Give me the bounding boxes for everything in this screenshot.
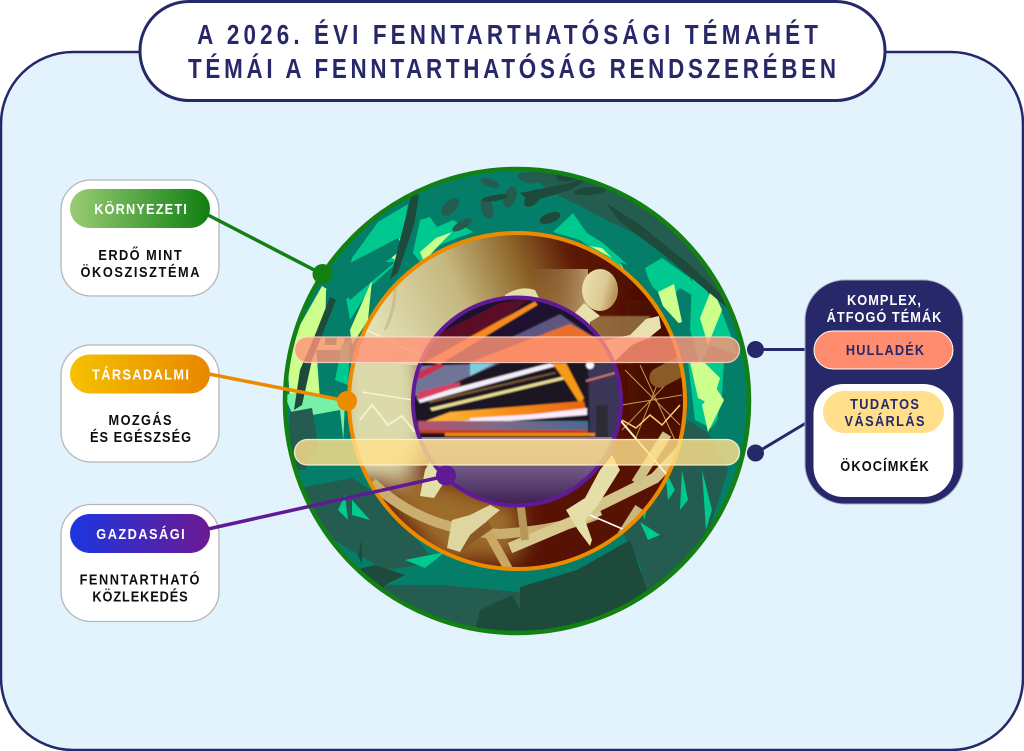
card: társadalmi [61, 345, 219, 462]
pill: gazdasági: GAZDASÁGI [96, 525, 185, 542]
connector: gazdasági [208, 466, 456, 529]
forest: bright clearings [287, 204, 738, 439]
pill: társadalmi [70, 354, 210, 394]
connector: társadalmi [209, 374, 357, 411]
wheel spokes [359, 287, 676, 567]
pill: tudatos vásárlás: TUDATOS [850, 395, 919, 412]
text: fenntartható közlekedés [80, 569, 200, 605]
forest: canopy top [528, 172, 718, 290]
text: erdő mint ökoszisztéma [80, 245, 200, 280]
pill: hulladék: HULLADÉK [846, 341, 924, 358]
panel heading: ÁTFOGÓ TÉMÁK [827, 307, 941, 325]
panel heading: KOMPLEX, [847, 291, 921, 308]
connector: tudatos vásárlás [747, 423, 806, 462]
text: mozgás és egészség [90, 411, 191, 445]
text: erdő mint ökoszisztéma: ÖKOSZISZTÉMA [80, 263, 200, 280]
card: környezeti [61, 180, 219, 296]
forest: tree trunks [325, 238, 695, 345]
text: erdő mint ökoszisztéma: ERDŐ MINT [98, 245, 182, 263]
panel: komplex, átfogó témák [805, 280, 963, 504]
panel heading [827, 291, 941, 325]
pill: környezeti [70, 189, 210, 228]
title: TÉMÁI A FENNTARTHATÓSÁG RENDSZERÉBEN [188, 51, 836, 85]
pill: hulladék [814, 331, 953, 369]
text: fenntartható közlekedés: KÖZLEKEDÉS [92, 587, 188, 605]
connector: környezeti [208, 215, 332, 284]
text: fenntartható közlekedés: FENNTARTHATÓ [80, 569, 200, 588]
pill: környezeti: KÖRNYEZETI [94, 200, 187, 217]
box: tudatos vásárlás [814, 384, 954, 497]
text: mozgás és egészség: ÉS EGÉSZSÉG [90, 428, 191, 445]
text: mozgás és egészség: MOZGÁS [109, 411, 171, 428]
capsule shape [649, 357, 682, 388]
title [140, 2, 885, 100]
title: A 2026. ÉVI FENNTARTHATÓSÁGI TÉMAHÉT [197, 17, 818, 51]
runner body [505, 269, 661, 362]
inner circle: runner and wheels [335, 230, 700, 575]
band: hulladék [294, 337, 740, 362]
forest: dark branches and leaves [294, 167, 732, 410]
card: gazdasági [61, 504, 219, 622]
background glow [351, 312, 683, 567]
runner legs [420, 445, 620, 552]
text: ökocímkék: ÖKOCÍMKÉK [840, 457, 929, 474]
band: tudatos vásárlás [294, 440, 740, 465]
forest circle [280, 165, 760, 650]
pill: tudatos vásárlás: VÁSÁRLÁS [845, 412, 924, 429]
pill: gazdasági [70, 514, 210, 553]
network lines [622, 365, 682, 440]
forest: lower undergrowth [288, 408, 728, 631]
central circle: light trails [410, 295, 625, 510]
pill: társadalmi: TÁRSADALMI [92, 365, 189, 383]
pill: tudatos vásárlás [823, 391, 944, 433]
connector: hulladék [747, 341, 806, 358]
